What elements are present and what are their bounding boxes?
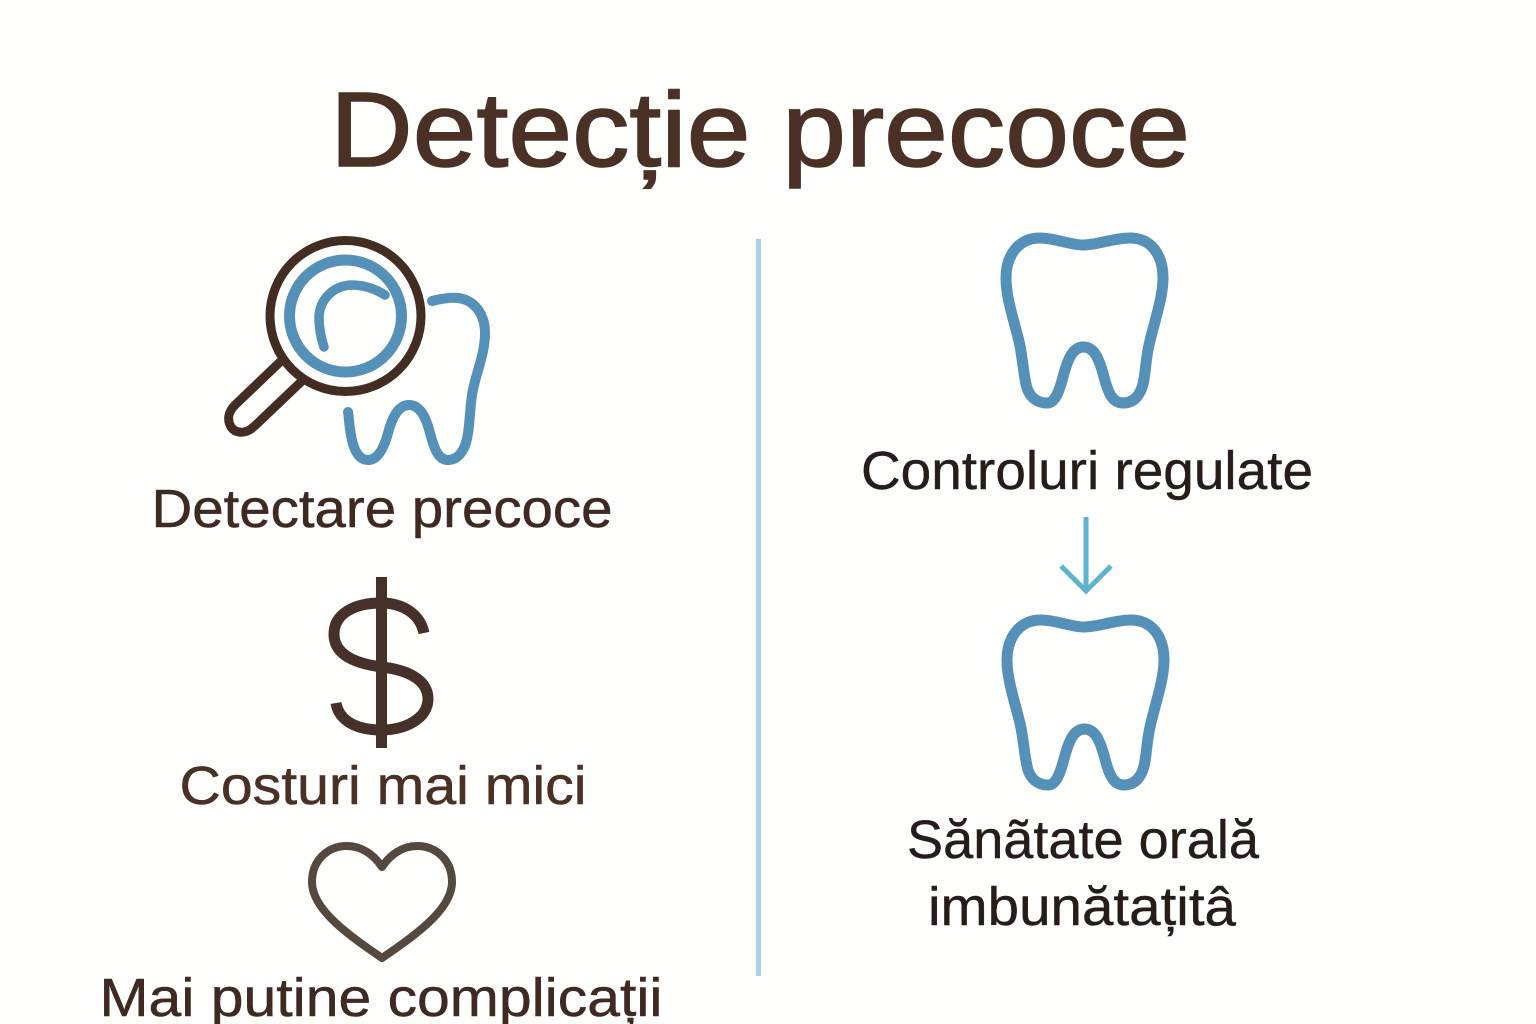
icon: magnifier over tooth <box>229 240 485 460</box>
panel: right column <box>861 238 1313 937</box>
label: controluri regulate: Controluri regulate <box>861 441 1313 501</box>
icon: heart <box>312 846 452 958</box>
icon: tooth top <box>1006 238 1163 403</box>
label: imbunatatita: imbunătațitâ <box>928 877 1237 937</box>
icon: dollar sign <box>334 577 428 748</box>
arrow: down <box>1061 517 1111 591</box>
label: detectare precoce: Detectare precoce <box>152 479 612 539</box>
icon: tooth bottom <box>1007 620 1164 785</box>
title: Detecție precoce <box>330 71 1190 189</box>
divider <box>756 239 761 976</box>
panel: left column <box>100 240 662 1024</box>
label: costuri mai mici: Costuri mai mici <box>180 756 586 816</box>
label: sanatate orala: Sănãtate orală <box>907 810 1260 870</box>
